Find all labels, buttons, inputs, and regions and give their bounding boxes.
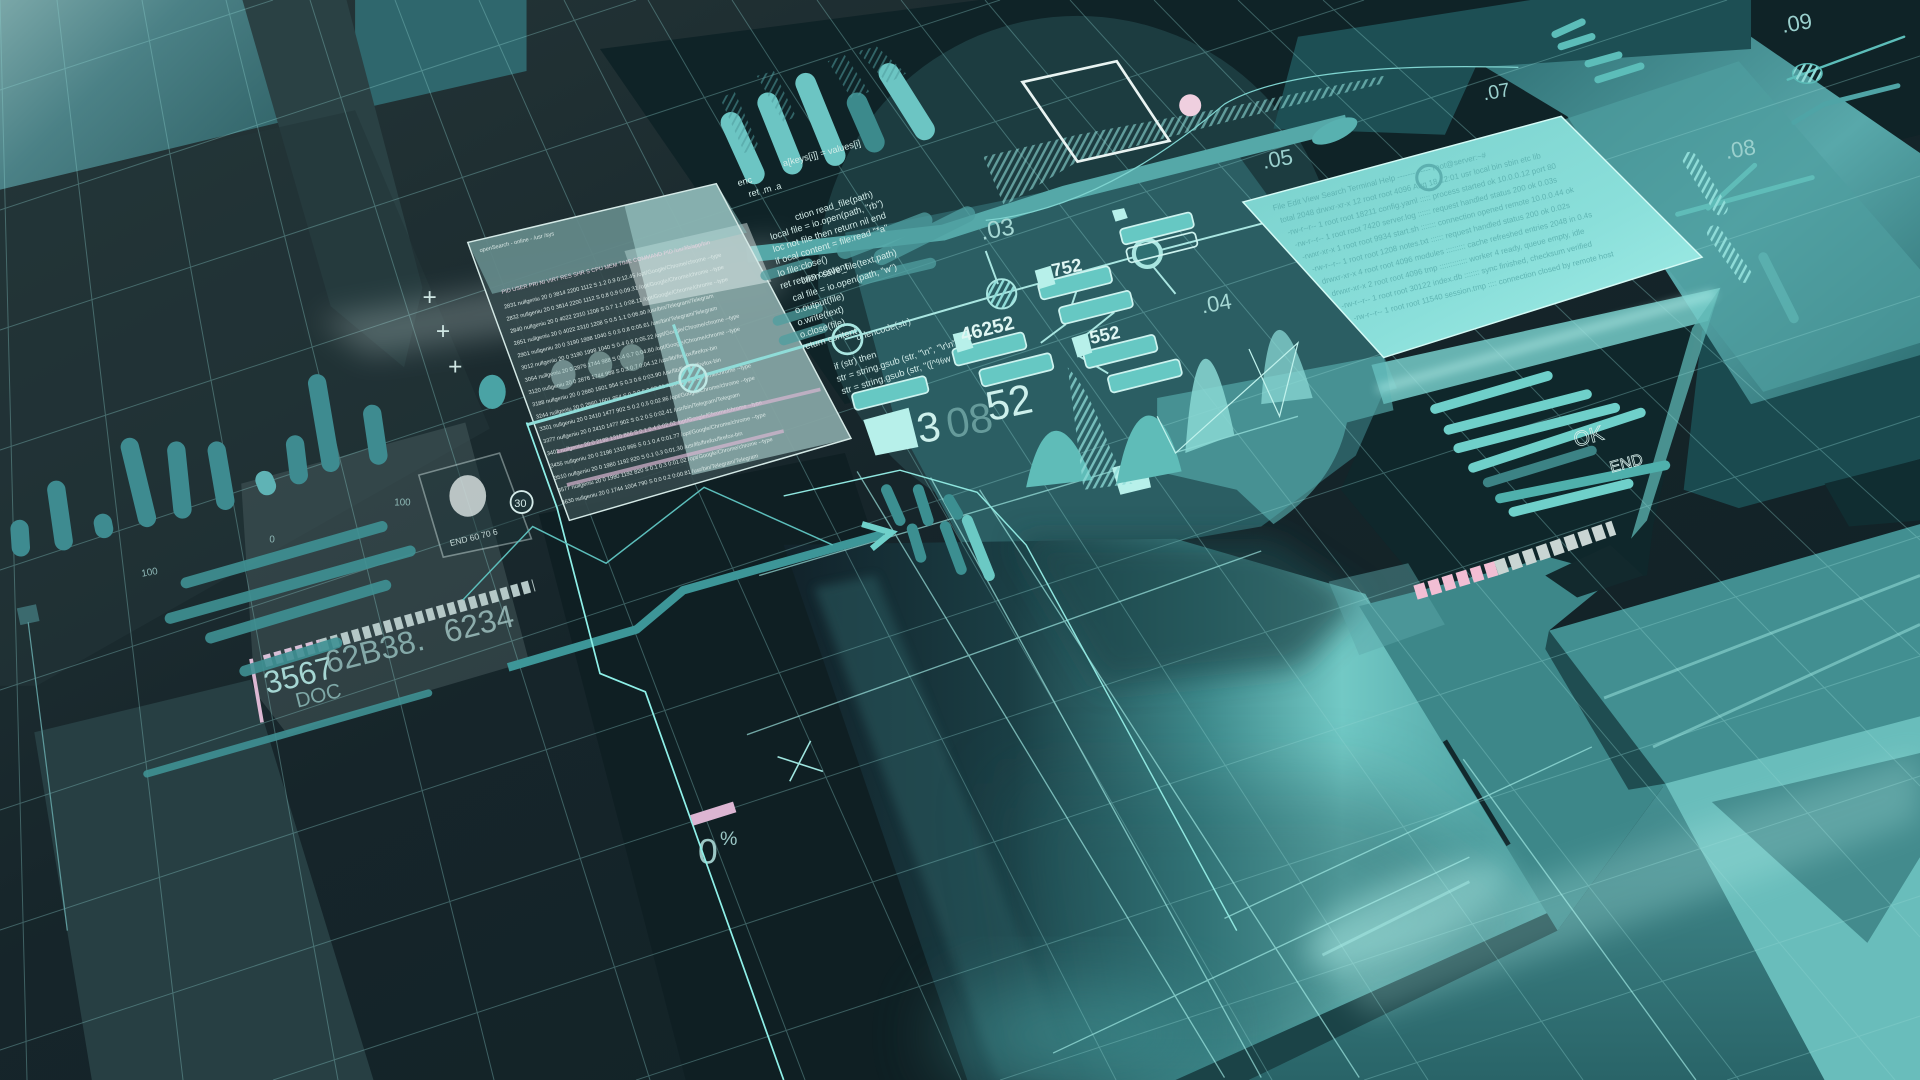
fingerprint card: 30 <box>514 498 527 510</box>
panel: bottom right floor <box>1249 735 1920 1080</box>
panel: upper right glass plate <box>1476 37 1920 404</box>
bar chart: top centre bars <box>731 73 924 174</box>
glass panel with log text: -rwxr-xr-x 1 root root 9934 start.sh ::::::: connection opened remote 10.0.0.44 ok <box>1301 185 1575 262</box>
status labels OK END: OK <box>1571 422 1606 452</box>
terminal window: 3120 nullgeniu 20 0 2876 1744 988 S 0.3 0.7 0:04.12 /usr/lib/firefox/firefox-bin <box>528 345 718 396</box>
code text block: local file = io.open(path, "rb") <box>769 198 884 242</box>
target box <box>1022 61 1169 162</box>
terminal window: 3402 nullgeniu 20 0 2198 1310 866 S 0.1 0.4 0:02.02 /opt/Google/Chrome/chrome --type <box>546 400 763 457</box>
arrow path <box>508 524 891 667</box>
panel: centre teal board <box>845 153 1408 576</box>
glass panel with log text: File Edit View Search Terminal Help ------------- root@server:~# <box>1272 151 1488 213</box>
left small square marker <box>17 604 67 931</box>
terminal window <box>468 184 851 520</box>
code text block: return content <box>801 326 858 352</box>
panel: charts glass tray <box>1157 355 1393 524</box>
glass panel with log text: total 2048 drwxr-xr-x 12 root root 4096 Aug 18 12:01 usr local bin sbin etc lib <box>1279 151 1542 225</box>
code text block: if (str) then <box>833 349 878 372</box>
panel: gray document plate <box>241 422 529 735</box>
glass panel with log text: -rw-r--r-- 1 root root 30122 index.db ::::::: sync finished, checksum verified <box>1340 239 1593 311</box>
terminal window: 3054 nullgeniu 20 0 2876 1744 988 S 0.4 0.7 0:04.80 /opt/Google/Chrome/chrome --type <box>524 327 741 384</box>
teal connector band <box>747 122 1347 255</box>
glowing tray line <box>1378 294 1714 389</box>
numeric labels: 52 <box>981 374 1037 430</box>
numeric labels: % <box>720 828 737 850</box>
numeric labels: 46252 <box>958 312 1017 346</box>
numeric labels <box>141 8 1814 871</box>
terminal window: 3455 nullgeniu 20 0 2198 1310 866 S 0.1 0.4 0:01.77 /opt/Google/Chrome/chrome --type <box>550 412 766 470</box>
numeric labels: 552 <box>1087 321 1122 348</box>
code text block: if ocal content = file:read "*a" <box>774 223 889 266</box>
terminal window: 3377 nullgeniu 20 0 2410 1477 902 S 0.2 0.5 0:02.41 /usr/bin/Telegram/Telegram <box>543 392 741 445</box>
slab lower darkening <box>1004 784 1561 1080</box>
terminal window: openSearch - online - /usr /sys <box>479 231 555 254</box>
panel: lower centre dark strip <box>539 453 1053 1080</box>
panel: lower right bright plate <box>1665 716 1920 1080</box>
pink node <box>1179 94 1201 116</box>
panel: text patch on slab <box>1329 563 1445 655</box>
panel: dark block by segments <box>1545 545 1643 598</box>
status pills <box>851 212 1198 411</box>
fingerprint card <box>419 453 533 557</box>
terminal window: 3577 nullgeniu 20 0 1980 1192 820 S 0.1 0.3 0:01.02 /opt/Google/Chrome/chrome --type <box>557 437 773 494</box>
terminal window: 3301 nullgeniu 20 0 2410 1477 902 S 0.2 0.5 0:02.86 /opt/Google/Chrome/chrome --type <box>539 376 755 433</box>
plus markers: + <box>448 354 462 381</box>
numeric labels: 0 <box>269 534 275 545</box>
numeric labels: 3 <box>913 402 944 452</box>
terminal window: 3188 nullgeniu 20 0 2660 1601 954 S 0.3 0.6 0:03.90 /usr/lib/firefox/firefox-bin <box>532 357 722 408</box>
panel: translucent disc <box>818 16 1337 535</box>
bright accent grid lines <box>747 416 1920 1080</box>
glass panel with log text: -rw-r--r-- 1 root root 7420 server.log :::::: request handled status 200 ok 0.03s <box>1294 175 1558 249</box>
code text block: ret .m .a <box>747 180 783 199</box>
terminal window: 3012 nullgeniu 20 0 3190 1998 1040 S 0.4 0.8 0:05.22 /opt/Google/Chrome/chrome --type <box>521 314 740 372</box>
code text block: lo file:close() <box>776 254 829 279</box>
glass panel with log text: drwxr-xr-x 4 root root 4096 modules ::::::::: cache refreshed entries 2048 in 0.4s <box>1321 210 1593 286</box>
gray plate bars <box>147 527 429 774</box>
glass panel with log text: -rw-r--r-- 1 root root 1208 notes.txt :::::: request handled status 200 ok 0.02s <box>1311 201 1571 274</box>
thin wave line <box>986 67 1518 220</box>
code text block: str = string.gsub (str, "\n", "\r\n") <box>835 337 961 384</box>
pink vertical marker <box>251 659 262 722</box>
numeric labels: 752 <box>1050 254 1084 281</box>
panel: glass slab skirt <box>1371 288 1720 404</box>
plus markers: + <box>422 284 437 311</box>
code text block: ret return content <box>779 261 849 291</box>
code text block: o.write(text) <box>796 304 845 328</box>
numeric labels: .09 <box>1779 8 1814 38</box>
floor lower glow <box>943 986 1212 1080</box>
code text block: ction read_file(path) <box>794 189 874 222</box>
panel: dark board with list bars <box>1341 306 1702 600</box>
thin data line <box>527 422 784 1080</box>
right thumb blob <box>1308 112 1361 150</box>
numeric labels: .08 <box>1723 134 1758 164</box>
panel: mid right plate <box>1549 524 1920 790</box>
glass panel with log text: -rw-r--r-- 1 root root 18211 config.yaml ::::: process started ok 10.0.0.12 port 80 <box>1286 161 1557 237</box>
terminal window: 2901 nullgeniu 20 0 3190 1998 1040 S 0.5 0.8 0:05.61 /usr/bin/Telegram/Telegram <box>517 306 718 359</box>
code text block: a[keys[i]] = values[i] <box>782 138 862 168</box>
code text block: o.output(file) <box>794 291 845 315</box>
status labels OK END <box>1571 422 1645 477</box>
pink loading bar <box>692 807 735 820</box>
code text block <box>736 138 966 396</box>
code text block: enc <box>736 174 754 188</box>
right progress segments <box>1416 528 1614 593</box>
lighter diagonal strip <box>814 576 1078 1080</box>
numeric labels: 100 <box>141 566 159 580</box>
polyline graph <box>463 487 833 600</box>
terminal window: 2851 nullgeniu 20 0 4022 2310 1208 S 0.5 1.1 0:06.90 /usr/bin/Telegram/Telegram <box>513 293 715 347</box>
bracket outline <box>784 470 1237 931</box>
hump chart <box>1026 330 1313 490</box>
node line across terminal <box>479 324 857 425</box>
network diagram <box>833 214 1298 373</box>
top right details <box>1555 22 1904 318</box>
panel: left column shading <box>0 110 490 686</box>
glass panel with log text <box>1243 116 1702 358</box>
panel: top centre dark board <box>600 0 1920 404</box>
code text block: cal file = io.open(path, "w") <box>791 262 898 303</box>
numeric labels: .05 <box>1260 144 1295 174</box>
code highlight pills <box>765 214 967 340</box>
code text block: str = string.gsub (str, "([^%w ])") <box>840 349 966 396</box>
numeric labels: 3567 <box>260 649 337 701</box>
panel: lower floor with bright slab <box>784 539 1561 1080</box>
code text block: loc not file then return nil end <box>772 210 887 254</box>
numeric labels: 6234 <box>440 598 517 650</box>
glare streaks <box>318 239 1920 1016</box>
glass panel with log text: drwxr-xr-x 2 root root 4096 tmp ::::::::::::: worker 4 ready, queue empty, idle <box>1331 226 1586 298</box>
terminal window: 2840 nullgeniu 20 0 4022 2310 1208 S 0.7 1.1 0:08.11 /opt/Google/Chrome/chrome --type <box>510 277 729 335</box>
left progress segments <box>264 585 534 661</box>
numeric labels: .04 <box>1199 288 1233 318</box>
bar chart: left hatched teal bars <box>20 383 378 547</box>
panel: lower left gray plate <box>34 680 373 1080</box>
numeric labels: .07 <box>1481 79 1512 105</box>
terminal window: 2831 nullgeniu 20 0 3814 2200 1112 S 1.2 0.9 0:12.45 /opt/Google/Chrome/chrome --type <box>504 253 722 311</box>
panel: lower right inset <box>1712 753 1920 943</box>
readout icons <box>863 208 1151 495</box>
glass panel with log text: -rw-r--r-- 1 root root 11540 session.tmp :::: connection closed by remote host <box>1353 249 1615 323</box>
terminal window: 3244 nullgeniu 20 0 2660 1601 954 S 0.2 0.6 0:03.31 /opt/Google/Chrome/chrome --type <box>535 363 752 421</box>
panel: top right strip <box>1273 0 1751 135</box>
status labels OK END: END <box>1608 451 1645 477</box>
list bars <box>1435 376 1665 512</box>
panel: teal plate beside slab <box>1359 557 1665 931</box>
plus markers <box>422 284 462 381</box>
crosshair <box>778 741 823 781</box>
code text block: urlencode(str) <box>855 316 912 342</box>
numeric labels: .03 <box>978 213 1017 246</box>
plus markers: + <box>436 318 450 345</box>
hatched ribbon <box>983 76 1384 206</box>
numeric labels: 62B38. <box>321 621 428 680</box>
panel: top-left teal plate <box>0 0 527 367</box>
slanted bars near arrow <box>887 490 989 576</box>
panel: slab shadow edge <box>1176 912 1561 1080</box>
code text block: ction save_file(text,path) <box>800 247 898 286</box>
terminal window: 2832 nullgeniu 20 0 3814 2200 1112 S 0.8 0.9 0:09.31 /opt/Google/Chrome/chrome --type <box>506 265 725 323</box>
panel: slab side seam <box>1445 741 1509 845</box>
panel: right teal shadow block <box>1684 276 1920 508</box>
code text block: o.close(file) <box>798 317 846 340</box>
plate front edge <box>1545 631 1665 790</box>
chart bars: hatched shadows <box>720 47 906 153</box>
numeric labels: DOC <box>293 679 344 713</box>
terminal window: PID USER PRI NI VIRT RES SHR S CPU MEM TIME COMMAND PID /usr/lib/app/bin <box>501 240 711 296</box>
slab top shade <box>1016 539 1365 686</box>
panel: dark right block <box>1824 459 1920 527</box>
terminal window: 3510 nullgeniu 20 0 1980 1192 820 S 0.1 0.3 0:01.30 /usr/lib/firefox/firefox-bin <box>554 431 743 482</box>
fingerprint card: END 60 70 6 <box>449 526 499 548</box>
numeric labels: 0 <box>698 831 718 871</box>
panel: glass side wedge <box>1631 288 1720 539</box>
numeric labels: 100 <box>394 498 411 509</box>
terminal window: 3630 nullgeniu 20 0 1744 1004 790 S 0.0 0.2 0:00.81 /usr/bin/Telegram/Telegram <box>561 453 759 506</box>
panel: top right glass <box>1555 61 1920 392</box>
numeric labels: 08 <box>942 393 996 447</box>
